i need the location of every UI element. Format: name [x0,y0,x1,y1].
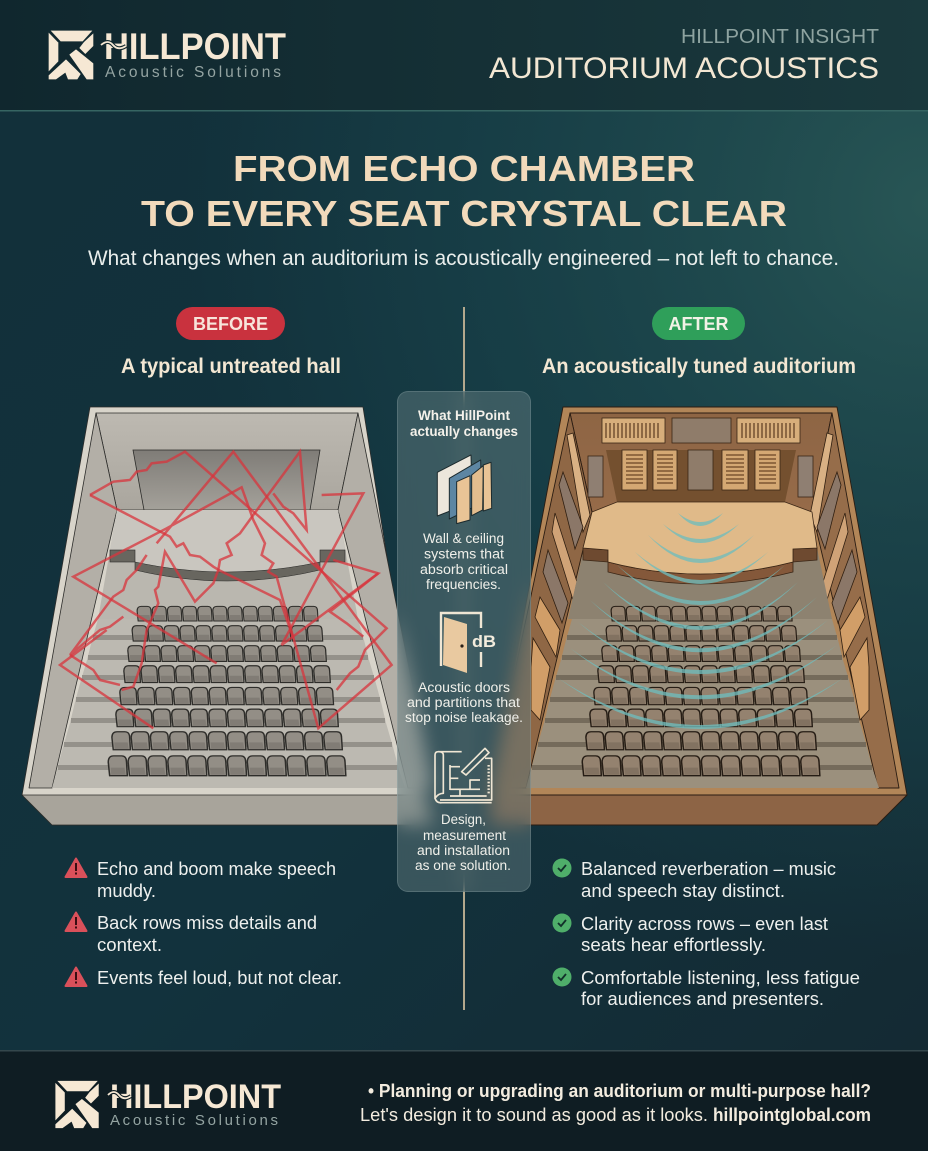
centre divider [463,307,465,1010]
text: acoustic doors: stop noise leakage. [405,710,523,725]
bullet: echo [66,858,336,901]
hall shell [22,407,433,825]
left wall panels [531,433,590,720]
stage alcove [133,450,320,510]
header eyebrow: HILLPOINT INSIGHT [681,26,879,48]
subtitle: What changes when an auditorium is acoustically engineered – not left to chance. [88,247,839,270]
before bullet list [66,858,342,988]
bullet: balanced [552,858,836,901]
header title: AUDITORIUM ACOUSTICS [489,52,879,85]
main title: TO EVERY SEAT CRYSTAL CLEAR [141,193,787,234]
text: design and installation [415,812,511,873]
panel: what HillPoint changes [397,391,531,892]
bullet: comfortable [552,967,860,1009]
text: design and installation: and installation [417,843,510,858]
after badge [652,307,745,340]
chaotic echo lines [60,452,392,728]
text: wall and ceiling systems: frequencies. [426,577,501,592]
bullet: clarity [552,913,828,955]
bullet: balanced: Balanced reverberation – music [581,858,836,879]
bullet: comfortable: Comfortable listening, less fatigue [581,967,860,988]
bullet: back rows: Back rows miss details and [97,912,317,933]
bullet: back rows [66,912,317,955]
text: design and installation: as one solution. [415,858,511,873]
stage front [110,550,345,581]
footer call to action [360,1081,871,1125]
controlled sound waves [558,513,843,729]
text: acoustic doors: and partitions that [407,695,520,710]
bullet: balanced: and speech stay distinct. [581,880,785,901]
bullet: clarity: Clarity across rows – even last [581,913,828,934]
bullet: comfortable: for audiences and presenters. [581,988,824,1009]
stage recess [606,450,796,502]
icon: acoustic panels [437,455,492,524]
footer call to action: • Planning or upgrading an auditorium or multi-purpose hall? [368,1081,871,1101]
logo wordmark: HILLPOINT [110,1078,281,1116]
text: wall and ceiling systems: systems that [424,546,504,562]
text: design and installation: measurement [423,828,506,843]
text: design and installation: Design, [441,812,486,827]
panel heading: What HillPoint [418,408,510,423]
after badge: AFTER [668,314,728,334]
seats [582,606,820,776]
before badge [176,307,285,340]
before badge: BEFORE [193,314,268,334]
logo tagline: Acoustic Solutions [110,1112,278,1129]
logo wordmark: HILLPOINT [104,26,286,67]
carpet floor [568,548,832,619]
icon: blueprint and pencil [435,748,492,803]
bullet: echo: muddy. [97,880,156,901]
text: acoustic doors [405,680,523,725]
panel heading [410,408,518,439]
right wall panels [810,433,869,720]
logo tagline: Acoustic Solutions [105,64,281,81]
footer band [0,1050,928,1151]
floor [98,510,358,619]
header band [0,0,928,112]
bullet: echo: Echo and boom make speech [97,858,336,879]
text: acoustic doors: Acoustic doors [418,680,510,695]
logo mark [55,1081,99,1128]
icon: acoustic door with dB mark: dB [472,632,496,651]
footer call to action: hillpointglobal.com [713,1105,871,1125]
text: wall and ceiling systems: absorb critical [420,562,508,577]
seating steps [526,619,879,788]
text: wall and ceiling systems [420,531,508,592]
before heading: A typical untreated hall [121,355,341,378]
after heading: An acoustically tuned auditorium [542,355,856,378]
icon: acoustic door with dB mark [441,613,496,673]
untreated hall illustration [22,407,433,825]
logo mark [49,31,93,79]
footer logo [55,1078,281,1129]
panel heading: actually changes [410,424,518,439]
footer call to action: Let's design it to sound as good as it looks. [360,1105,708,1125]
tuned hall illustration [490,407,907,825]
stepped risers [52,619,405,788]
text: wall and ceiling systems: Wall & ceiling [423,531,504,546]
seats [108,606,346,776]
bullet: events: Events feel loud, but not clear. [97,967,342,988]
main title: FROM ECHO CHAMBER [233,148,695,189]
stage [583,502,817,584]
main title [141,148,787,234]
after bullet list [552,858,860,1009]
bullet: clarity: seats hear effortlessly. [581,934,766,955]
header logo [49,26,286,81]
stage floor [110,510,345,572]
back wall panels [588,418,813,497]
hall shell [490,407,907,825]
bullet: back rows: context. [97,934,162,955]
